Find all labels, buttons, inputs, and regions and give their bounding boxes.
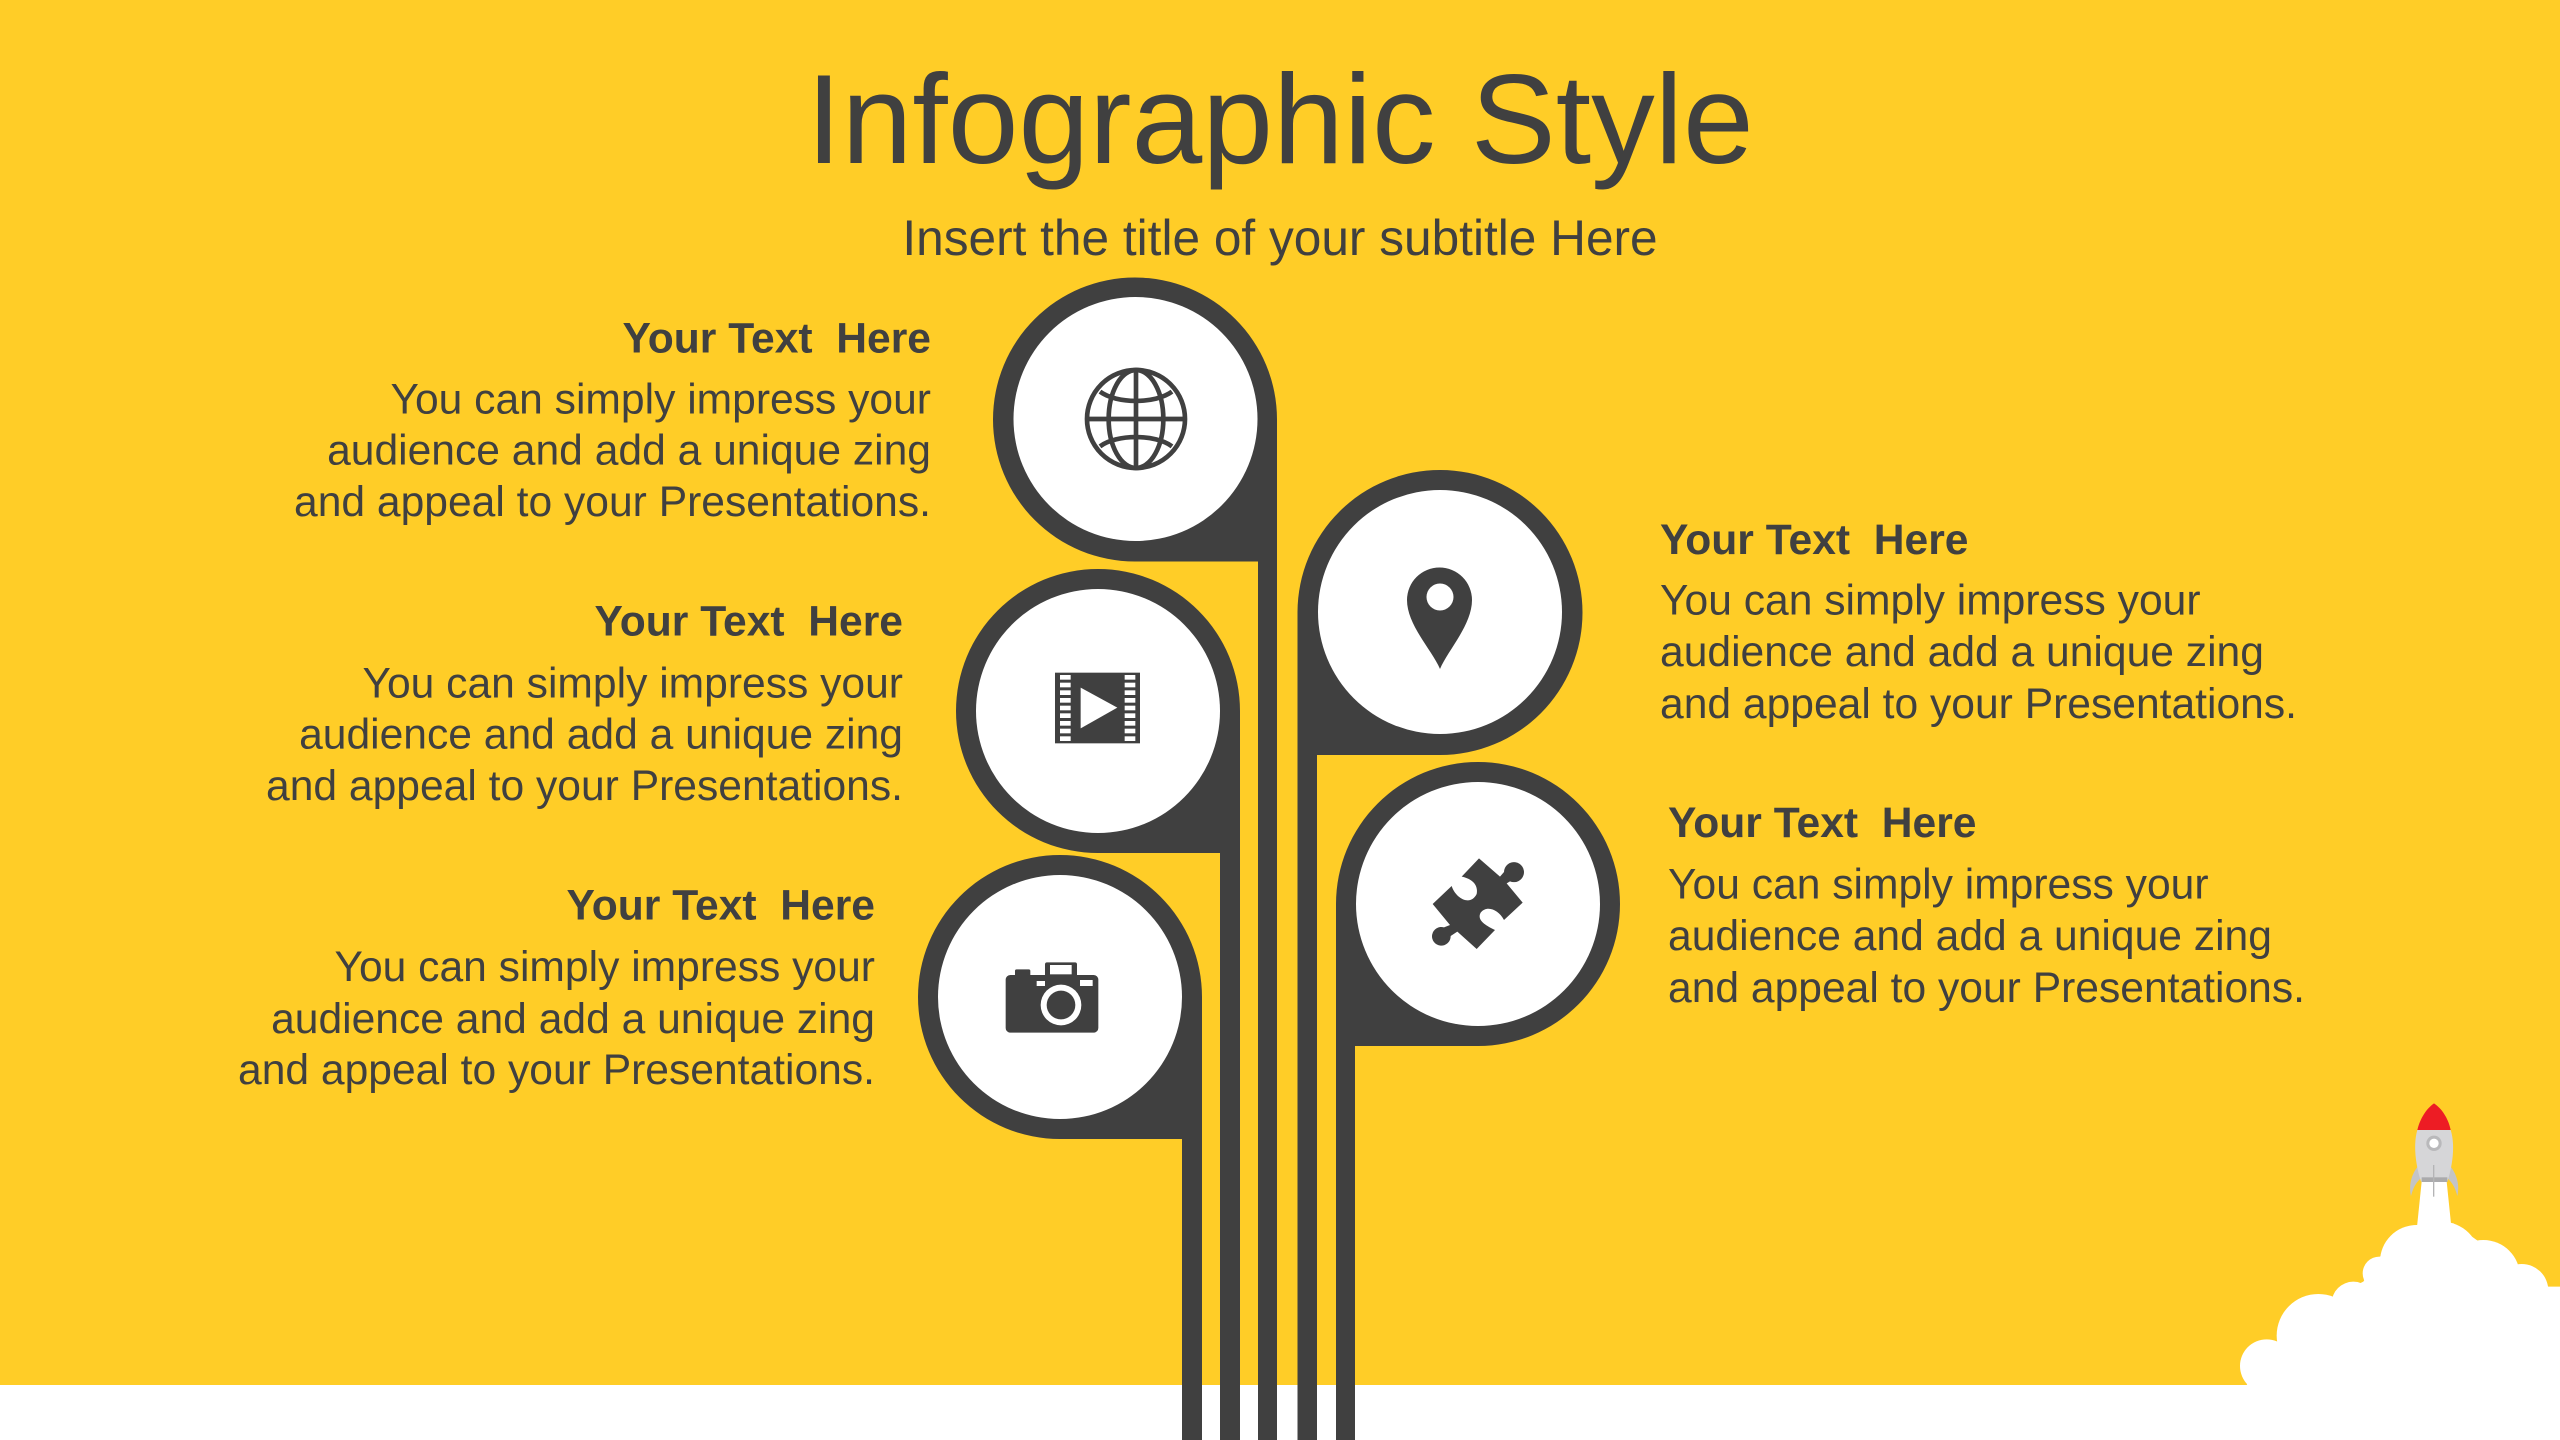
stem and ring: globe bbox=[993, 278, 1277, 1440]
body: camera: audience and add a unique zing bbox=[271, 995, 875, 1043]
body: puzzle: audience and add a unique zing bbox=[1668, 912, 2272, 960]
body: location: and appeal to your Presentations. bbox=[1660, 680, 2297, 728]
heading: globe: Your Text Here bbox=[622, 314, 931, 362]
stem and ring: camera bbox=[918, 855, 1202, 1440]
illustration: rocket launching from cloud bbox=[2240, 1103, 2560, 1393]
heading: puzzle: Your Text Here bbox=[1668, 799, 1976, 847]
panel: camera pin bbox=[918, 855, 1202, 1440]
body: video: You can simply impress your bbox=[362, 660, 903, 708]
text block: globe bbox=[294, 314, 931, 526]
text block: location bbox=[1660, 516, 2297, 728]
body: video: and appeal to your Presentations. bbox=[266, 762, 903, 810]
body: camera: You can simply impress your bbox=[334, 943, 875, 991]
body: globe: You can simply impress your bbox=[390, 376, 931, 424]
panel: globe pin bbox=[993, 278, 1277, 1440]
text block: video bbox=[266, 598, 903, 810]
white disc: camera bbox=[938, 875, 1182, 1119]
heading: video: Your Text Here bbox=[594, 598, 903, 646]
body: puzzle: You can simply impress your bbox=[1668, 860, 2209, 908]
white disc: video bbox=[976, 589, 1220, 833]
white disc: location bbox=[1318, 490, 1562, 734]
white disc: puzzle bbox=[1356, 782, 1600, 1026]
panel: puzzle pin bbox=[1336, 762, 1620, 1440]
icon: map marker bbox=[1407, 568, 1472, 669]
white disc: globe bbox=[1014, 297, 1258, 541]
heading: camera: Your Text Here bbox=[566, 882, 875, 930]
text block: puzzle bbox=[1668, 799, 2305, 1012]
title: Infographic Style bbox=[806, 48, 1754, 190]
icon: globe bbox=[1087, 370, 1185, 468]
stem and ring: puzzle bbox=[1336, 762, 1620, 1440]
panel: video pin bbox=[956, 569, 1240, 1440]
stem and ring: location bbox=[1298, 470, 1582, 1440]
body: globe: and appeal to your Presentations. bbox=[294, 478, 931, 526]
body: puzzle: and appeal to your Presentations. bbox=[1668, 964, 2305, 1012]
icon: puzzle piece bbox=[1432, 858, 1524, 949]
body: video: audience and add a unique zing bbox=[299, 710, 903, 758]
heading: location: Your Text Here bbox=[1660, 516, 1968, 564]
panel: location pin bbox=[1298, 470, 1582, 1440]
subtitle: Insert the title of your subtitle Here bbox=[902, 210, 1658, 266]
stem and ring: video bbox=[956, 569, 1240, 1440]
body: camera: and appeal to your Presentations. bbox=[238, 1046, 875, 1094]
body: globe: audience and add a unique zing bbox=[327, 426, 931, 474]
text block: camera bbox=[238, 882, 875, 1094]
body: location: audience and add a unique zing bbox=[1660, 628, 2264, 676]
rocket bbox=[2410, 1103, 2458, 1197]
icon: camera bbox=[1006, 962, 1098, 1033]
body: location: You can simply impress your bbox=[1660, 576, 2201, 624]
white ground band bbox=[0, 1385, 2560, 1440]
cloud bbox=[2240, 1182, 2560, 1393]
icon: film play bbox=[1055, 673, 1140, 743]
